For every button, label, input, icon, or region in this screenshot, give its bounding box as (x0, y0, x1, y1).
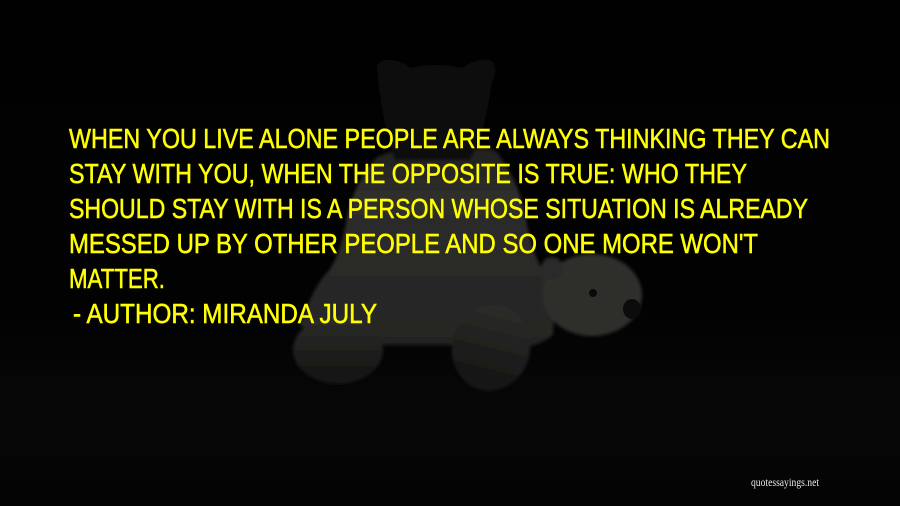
bear torso and legs (300, 144, 554, 347)
quote text (69, 123, 830, 294)
left foot (293, 316, 383, 384)
tiger head (377, 60, 496, 160)
quote text: MATTER. (69, 263, 165, 294)
right foot (443, 297, 539, 399)
small bear eye (589, 289, 597, 297)
author attribution: - AUTHOR: MIRANDA JULY (73, 298, 377, 329)
quote text: STAY WITH YOU, WHEN THE OPPOSITE IS TRUE: WHO THEY (69, 158, 747, 189)
watermark: quotessayings.net (751, 475, 820, 489)
small bear head (542, 254, 642, 336)
illustration: large plush bear with tiger head (293, 60, 642, 399)
small bear ear (541, 257, 563, 279)
quote text: MESSED UP BY OTHER PEOPLE AND SO ONE MORE WON'T (69, 228, 758, 259)
small bear nose (623, 299, 641, 319)
